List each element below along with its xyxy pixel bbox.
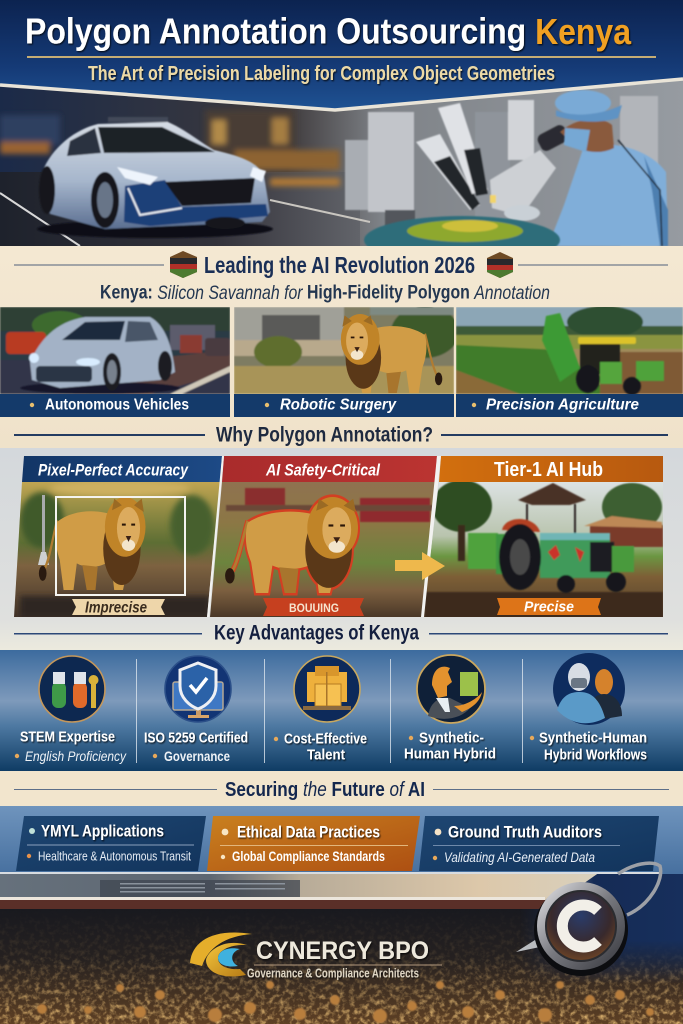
panel: robotic surgery (234, 306, 459, 417)
caption: Robotic Surgery (280, 396, 397, 414)
panel: tier-1 AI hub: Tier-1 AI Hub (494, 459, 603, 481)
ground (425, 592, 663, 618)
card: ground truth auditors: Ground Truth Auditors (448, 822, 602, 842)
navy right panel (520, 874, 683, 984)
caption (234, 394, 454, 417)
tractor (542, 313, 664, 395)
panel: AI safety-critical (205, 456, 440, 617)
heading: leading the AI revolution: Leading the AI Revolution 2026 (204, 252, 475, 278)
caption (0, 394, 230, 417)
icon: STEM test tubes (39, 656, 105, 722)
gray section (0, 448, 683, 650)
text: cost-effective talent: Cost-Effective (284, 730, 367, 748)
heading: key advantages: Key Advantages of Kenya (214, 622, 419, 644)
text: STEM expertise (15, 728, 127, 764)
building strip (0, 872, 660, 909)
icon: Kenya shield right (487, 252, 513, 278)
tissue mound (363, 215, 561, 246)
caption: Autonomous Vehicles (45, 396, 189, 414)
road markings (0, 193, 80, 246)
arrow (395, 552, 445, 580)
heading: why polygon annotation: Why Polygon Annotation? (216, 424, 433, 446)
header banner (0, 0, 683, 111)
seal: C emblem (516, 863, 661, 976)
panel: pixel-perfect accuracy (10, 456, 225, 618)
logo: Cynergy BPO: Governance & Compliance Architects (247, 966, 419, 980)
icon: cost-effective boxes (294, 656, 360, 722)
title: Polygon Annotation Outsourcing Kenya (25, 10, 632, 52)
card: ethical data practices: Ethical Data Practices (237, 822, 380, 842)
card: YMYL applications (16, 816, 206, 871)
text: hybrid workflows (530, 730, 647, 764)
panel: autonomous vehicles (0, 307, 230, 417)
cream section (0, 246, 683, 448)
text: synthetic-human hybrid (404, 730, 496, 762)
panel: tier-1 AI hub (420, 456, 665, 618)
icon: hybrid workflows people (553, 653, 625, 725)
heading: securing the future of AI: Securing the Future of AI (225, 779, 425, 801)
tag: precise (497, 598, 601, 616)
caption: Precision Agriculture (486, 396, 639, 414)
logo: Cynergy BPO: CYNERGY BPO (256, 937, 429, 965)
tag: bounding: BOUUING (289, 601, 339, 615)
panel divider lines (207, 456, 224, 617)
tractor (468, 483, 634, 593)
tag: imprecise: Imprecise (85, 600, 147, 616)
text: hybrid workflows: Synthetic-Human (539, 730, 647, 746)
icon: Kenya shield left (170, 251, 197, 278)
text: hybrid workflows: Hybrid Workflows (544, 746, 647, 764)
icon: ISO shield on monitor (165, 656, 231, 722)
heading: securing the future of AI (0, 771, 683, 806)
robotic surgery arms (344, 96, 658, 226)
card: ethical data practices (207, 816, 420, 871)
text: STEM expertise: English Proficiency (25, 748, 127, 764)
heading: leading the AI revolution (14, 251, 668, 278)
panel: AI safety-critical: AI Safety-Critical (265, 460, 381, 480)
text: cost-effective talent (274, 730, 367, 764)
soil footer (0, 874, 683, 1024)
card: YMYL applications: Healthcare & Autonomous Transit (38, 848, 191, 864)
text: ISO certified (144, 730, 248, 764)
text: ISO certified: Governance (164, 748, 230, 764)
title underline (27, 56, 656, 58)
logo: Cynergy BPO (190, 932, 442, 980)
surgeon (498, 90, 668, 250)
text: synthetic-human hybrid: Human Hybrid (404, 746, 496, 762)
trees (432, 480, 492, 532)
imprecise bounding box (56, 497, 185, 595)
icon: C swoosh mark (190, 932, 252, 977)
car (37, 117, 273, 238)
text: synthetic-human hybrid: Synthetic- (419, 730, 484, 746)
subtitle: The Art of Precision Labeling for Complex Object Geometries (88, 63, 555, 85)
text: ISO certified: ISO 5259 Certified (144, 730, 248, 746)
icon: synthetic-human hybrid (417, 655, 485, 723)
panel: precision agriculture (456, 306, 683, 417)
card: YMYL applications: YMYL Applications (41, 822, 164, 840)
text: STEM expertise: STEM Expertise (20, 728, 115, 746)
card: ethical data practices: Global Compliance Standards (232, 848, 385, 864)
card: ground truth auditors: Validating AI-Generated Data (444, 849, 595, 865)
subheading: Kenya: Silicon Savannah for High-Fidelity Polygon Annotation (100, 282, 550, 304)
city lights (0, 110, 340, 186)
panel: pixel-perfect accuracy: Pixel-Perfect Accuracy (38, 460, 189, 480)
tag: bounding (263, 598, 364, 616)
panel: securing band background (0, 806, 683, 874)
text: cost-effective talent: Talent (307, 746, 345, 764)
card: ground truth auditors (419, 816, 659, 871)
building (590, 525, 663, 547)
tag: precise: Precise (524, 598, 574, 616)
caption (456, 394, 683, 417)
panel: key advantages band (0, 650, 683, 771)
hero image: autonomous car and robotic surgery (0, 80, 683, 246)
white chevron border (0, 79, 683, 110)
